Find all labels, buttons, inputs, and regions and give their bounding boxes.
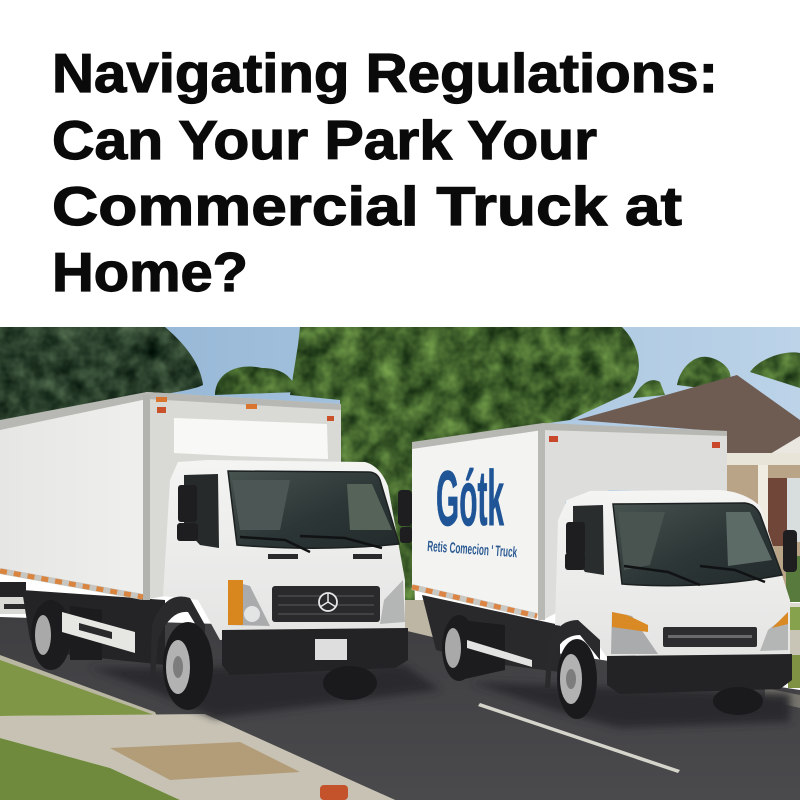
title: Can Your Park Your <box>52 109 597 171</box>
windshield reflection <box>726 512 772 566</box>
grille <box>272 586 380 622</box>
windshield reflection <box>347 484 392 530</box>
headlights <box>228 580 405 626</box>
far truck fragment <box>0 582 26 614</box>
front wheel <box>557 639 597 719</box>
windshield <box>228 471 399 548</box>
far front wheel <box>713 687 763 715</box>
bumper <box>222 628 408 675</box>
mirrors <box>565 522 797 572</box>
front wheel <box>163 622 213 710</box>
logo text <box>427 454 518 561</box>
title <box>52 42 718 303</box>
rear wheel <box>31 600 102 670</box>
chassis <box>22 590 165 665</box>
cargo box <box>0 392 147 598</box>
title: Commercial Truck at <box>52 175 682 237</box>
wipers <box>624 566 765 585</box>
side rail <box>62 612 135 653</box>
wheel arch <box>150 597 205 680</box>
traffic cone <box>320 785 348 800</box>
rear wheel <box>442 615 505 681</box>
side rail <box>467 640 532 667</box>
cargo box <box>412 424 543 620</box>
wheel arch <box>545 620 600 688</box>
house <box>577 375 800 602</box>
sky <box>0 327 800 567</box>
side window <box>184 474 219 548</box>
bumper <box>607 654 792 694</box>
grass and sidewalk <box>0 655 395 800</box>
title: Navigating Regulations: <box>52 42 718 104</box>
grille <box>663 627 757 647</box>
truck: right: Gótk <box>436 454 504 542</box>
side window <box>573 505 604 575</box>
wipers <box>240 536 382 552</box>
windshield <box>613 503 782 586</box>
far sidewalk <box>403 600 445 640</box>
chassis <box>422 595 560 672</box>
logo text: Retis Comecion ' Truck <box>427 538 518 561</box>
hood strip <box>268 554 298 559</box>
cab <box>163 460 405 640</box>
road marking <box>478 703 680 773</box>
trees <box>0 327 800 610</box>
headlights <box>611 612 788 654</box>
truck: left <box>0 392 440 718</box>
truck: right <box>412 423 797 728</box>
title: Home? <box>52 241 248 303</box>
road <box>0 617 800 800</box>
cab <box>555 490 790 662</box>
photo: trucks parked on a residential street <box>0 327 800 800</box>
mirrors <box>177 485 412 543</box>
far front wheel <box>323 666 377 700</box>
